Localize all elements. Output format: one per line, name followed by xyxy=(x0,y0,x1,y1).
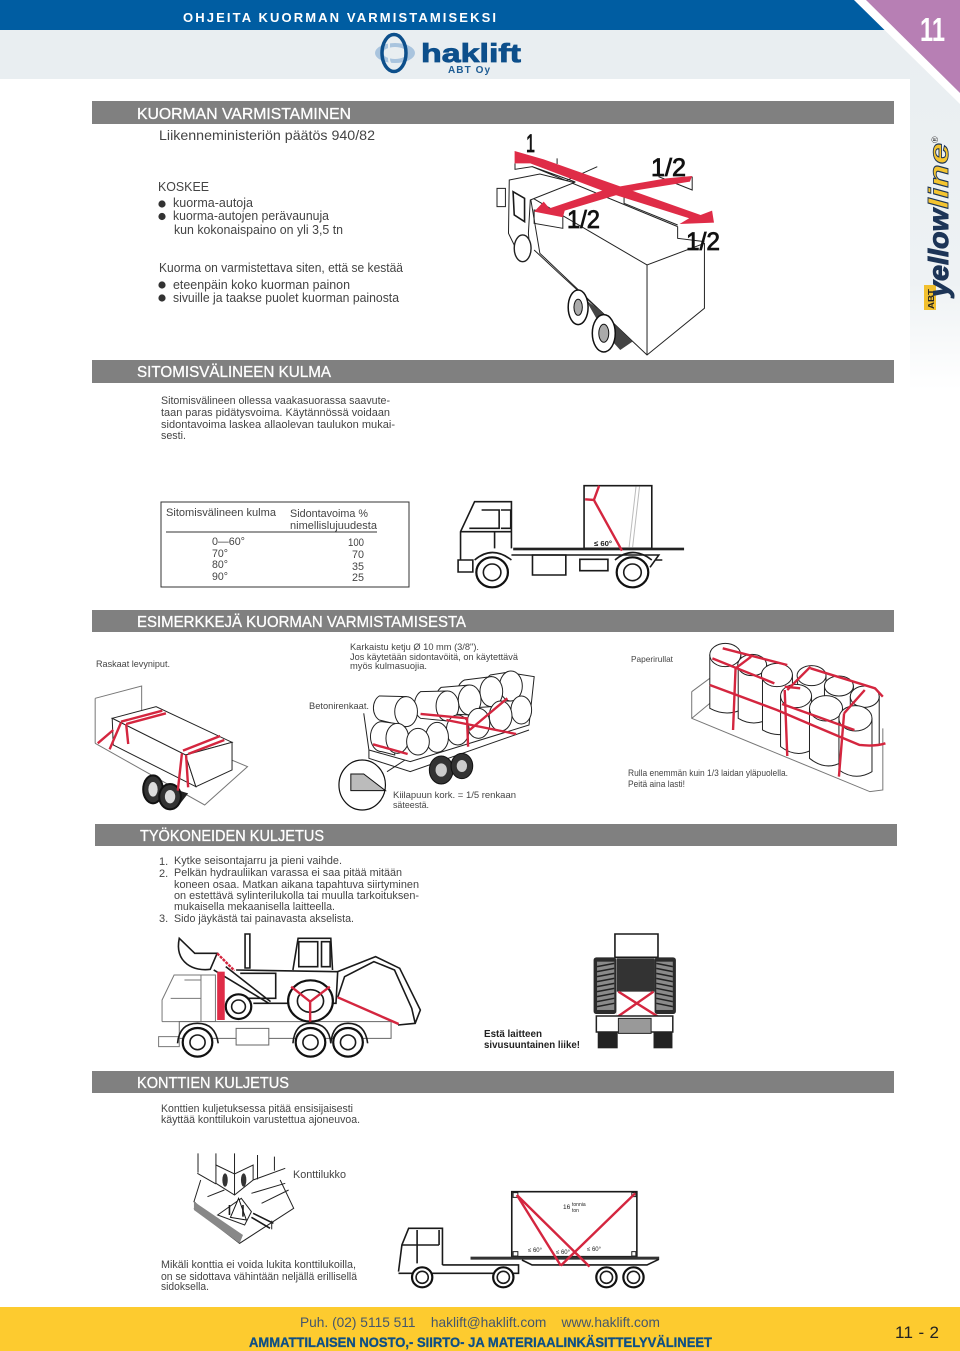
table: angle and binding force: nimellislujuudesta xyxy=(290,520,378,532)
heading: ESIMERKKEJÄ KUORMAN VARMISTAMISESTA xyxy=(137,613,466,631)
illustration: container on semi-trailer: ≤ 60° xyxy=(528,1248,543,1254)
text block: machine transport instructions: 1. xyxy=(159,856,168,868)
text block: machine transport instructions: 2. xyxy=(159,868,168,880)
text block: four lashings note: Mikäli konttia ei voida lukita konttilukoilla, xyxy=(161,1259,356,1271)
text block: machine transport instructions: mukaisella mekaanisella laitteella. xyxy=(174,901,335,913)
heading: TYÖKONEIDEN KULJETUS xyxy=(140,827,324,845)
text block: regulation: eteenpäin koko kuorman painon xyxy=(173,278,350,292)
text block: example captions: Karkaistu ketju Ø 10 mm (3/8"). xyxy=(350,642,479,653)
panel: sitomisvalineen kulma xyxy=(92,360,894,587)
text block: example captions: Rulla enemmän kuin 1/3 laidan yläpuolella. xyxy=(628,768,788,779)
header bar: OHJEITA KUORMAN VARMISTAMISEKSI xyxy=(183,10,496,25)
illustration: heavy plate bundles xyxy=(95,686,248,809)
illustration: truck with load forces: 1/2 xyxy=(686,228,720,256)
table: angle and binding force: 70° xyxy=(212,548,228,560)
text block: container intro xyxy=(161,1103,360,1126)
logo: haklift: ABT Oy xyxy=(448,65,490,76)
text block: machine transport instructions: Pelkän hydrauliikan varassa ei saa pitää mitään xyxy=(174,867,402,879)
page number: 11 - 2 xyxy=(895,1323,939,1342)
logo: yellowline vertical: line xyxy=(923,143,954,209)
callout: prevent sideways movement xyxy=(484,1028,580,1051)
illustration: container on semi-trailer xyxy=(399,1192,659,1287)
table: angle and binding force: 90° xyxy=(212,571,228,583)
text block: example captions: Kiilapuun kork. = 1/5 renkaan xyxy=(393,790,516,801)
text block: regulation: KOSKEE xyxy=(158,180,209,194)
text block: example captions xyxy=(96,642,788,811)
heading: KUORMAN VARMISTAMINEN xyxy=(137,106,351,123)
table: angle and binding force: 100 xyxy=(348,537,364,549)
footer slogan: AMMATTILAISEN NOSTO,- SIIRTO- JA MATERIAALINKÄSITTELYVÄLINEET xyxy=(249,1334,712,1350)
illustration: container lock xyxy=(194,1153,294,1243)
text block: container intro: Konttien kuljetuksessa pitää ensisijaisesti xyxy=(161,1103,353,1115)
text block: machine transport instructions xyxy=(159,855,419,925)
text block: example captions: Peitä aina lasti! xyxy=(628,779,685,790)
table: angle and binding force: 80° xyxy=(212,559,228,571)
text block: regulation: kuorma-autojen perävaunuja xyxy=(173,209,329,223)
table: angle and binding force: 70 xyxy=(352,549,364,561)
logo: yellowline vertical: ® xyxy=(930,136,940,143)
illustration: container on semi-trailer: ≤ 60° xyxy=(556,1250,571,1256)
heading: SITOMISVÄLINEEN KULMA xyxy=(137,363,331,381)
logo: yellowline vertical: yellow xyxy=(923,207,954,299)
text block: regulation xyxy=(158,127,403,305)
text block: example captions: Betonirenkaat. xyxy=(309,701,369,712)
footer bar xyxy=(0,1307,960,1351)
heading xyxy=(92,1071,894,1093)
logo: yellowline vertical xyxy=(923,136,954,310)
footer contact details: Puh. (02) 5115 511 haklift@haklift.com www.haklift.com xyxy=(300,1314,660,1330)
corner tab with chapter number: 11 xyxy=(920,11,945,48)
text block: angle explanation: taan paras pidätysvoima. Käytännössä voidaan xyxy=(161,407,390,419)
table: angle and binding force xyxy=(161,502,409,587)
text block: machine transport instructions: koneen osaa. Matkan aikana tapahtuva siirtyminen xyxy=(174,879,419,891)
illustration: container on semi-trailer: tonnia xyxy=(572,1202,586,1208)
heading: KONTTIEN KULJETUS xyxy=(137,1075,289,1092)
text block: example captions: Jos käytetään sidontavöitä, on käytettävä xyxy=(350,652,519,663)
text block: machine transport instructions: 3. xyxy=(159,913,168,925)
text block: four lashings note: sidoksella. xyxy=(161,1281,209,1293)
header bar xyxy=(0,0,885,30)
illustration: concrete rings on trailer xyxy=(339,671,534,810)
illustration: tractor from behind xyxy=(594,934,676,1048)
table: angle and binding force: Sidontavoima % xyxy=(290,508,368,520)
illustration: container on semi-trailer: ton xyxy=(572,1208,579,1214)
callout: prevent sideways movement: sivusuuntainen liike! xyxy=(484,1039,580,1051)
text block: regulation: Kuorma on varmistettava siten, että se kestää xyxy=(159,261,403,275)
right side strip xyxy=(910,30,960,390)
text block: regulation: kun kokonaispaino on yli 3,5 tn xyxy=(174,223,343,237)
text block: machine transport instructions: on estettävä sylinterilukolla tai muulla tarkoituksen- xyxy=(174,890,419,902)
panel: konttien kuljetus xyxy=(92,1071,894,1293)
logo: yellowline vertical: ABT xyxy=(927,289,936,309)
text block: example captions: Raskaat levyniput. xyxy=(96,659,170,670)
text block: example captions: säteestä. xyxy=(393,800,429,811)
table: angle and binding force: 35 xyxy=(352,561,364,573)
illustration: wheel loader on truck xyxy=(159,934,420,1057)
top row of rings xyxy=(373,671,522,727)
illustration: flatbed truck with 60 degree lashing xyxy=(458,486,684,587)
text block: regulation: sivuille ja taakse puolet kuorman painosta xyxy=(173,291,399,305)
illustration: truck with load forces: 1/2 xyxy=(651,154,686,182)
text block: angle explanation: sidontavoima laskea allaolevan taulukon mukai- xyxy=(161,419,395,431)
callout: prevent sideways movement: Estä laitteen xyxy=(484,1028,542,1040)
text block: regulation: Liikenneministeriön päätös 940/82 xyxy=(159,127,375,143)
text block: example captions: Paperirullat xyxy=(631,654,674,664)
illustration: paper rolls xyxy=(692,643,885,792)
panel: tyokoneiden kuljetus xyxy=(95,824,897,1057)
heading xyxy=(92,101,894,124)
heading xyxy=(92,360,894,383)
illustration: container on semi-trailer: ≤ 60° xyxy=(587,1247,602,1253)
illustration: truck with load forces: 1 xyxy=(526,130,535,158)
panel: esimerkkeja xyxy=(92,610,894,811)
corner tab with chapter number xyxy=(854,0,960,104)
text: container lock label: Konttilukko xyxy=(293,1169,346,1181)
heading xyxy=(92,610,894,632)
panel: kuorman varmistaminen xyxy=(92,101,894,355)
text block: regulation: kuorma-autoja xyxy=(173,196,253,210)
text block: machine transport instructions: Sido jäykästä tai painavasta akselista. xyxy=(174,913,354,925)
illustration: truck with load forces xyxy=(497,130,720,355)
table: angle and binding force: 0—60° xyxy=(212,536,245,548)
text block: container intro: käyttää konttilukoin varustettua ajoneuvoa. xyxy=(161,1114,360,1126)
text block: machine transport instructions: Kytke seisontajarru ja pieni vaihde. xyxy=(174,855,342,867)
text block: angle explanation: Sitomisvälineen ollessa vaakasuorassa saavute- xyxy=(161,395,390,407)
text block: angle explanation: sesti. xyxy=(161,430,186,442)
table: angle and binding force: 25 xyxy=(352,572,364,584)
text block: example captions: myös kulmasuojia. xyxy=(350,661,427,672)
text block: angle explanation xyxy=(161,395,395,442)
text block: four lashings note: on se sidottava vähintään neljällä erillisellä xyxy=(161,1271,357,1283)
illustration: flatbed truck with 60 degree lashing: ≤ 60° xyxy=(594,539,612,548)
logo: haklift xyxy=(375,34,521,76)
bottom row of rings xyxy=(370,696,532,755)
illustration: truck with load forces: 1/2 xyxy=(567,206,600,234)
heading xyxy=(95,824,897,846)
table: angle and binding force: Sitomisvälineen kulma xyxy=(166,507,277,519)
logo: haklift: haklift xyxy=(421,38,521,68)
text block: four lashings note xyxy=(161,1259,357,1293)
light header band xyxy=(0,30,910,79)
illustration: container on semi-trailer: 16 xyxy=(563,1204,571,1211)
